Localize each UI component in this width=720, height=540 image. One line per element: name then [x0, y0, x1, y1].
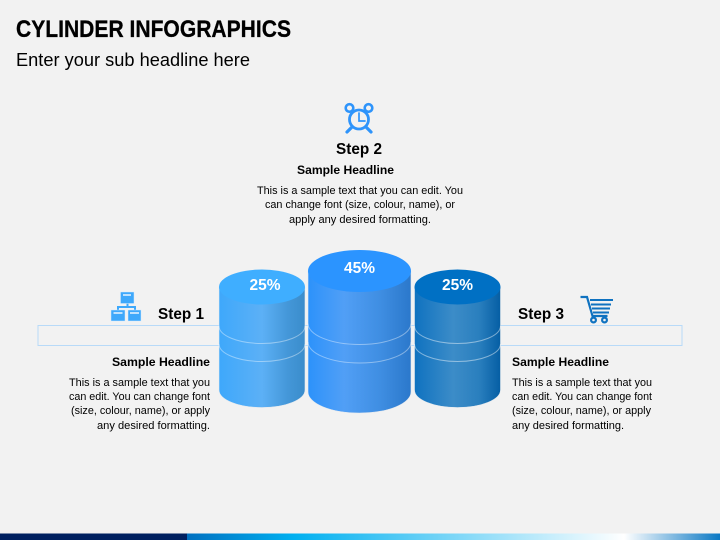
horizontal band	[38, 326, 682, 346]
footer bar	[0, 534, 720, 540]
title: CYLINDER INFOGRAPHICS	[16, 16, 291, 43]
step 3 text block	[512, 355, 652, 432]
step 3 text block: can edit. You can change font	[512, 391, 652, 403]
step 2 text block	[257, 163, 463, 226]
step 1 text block: any desired formatting.	[97, 420, 210, 432]
step 1 label: Step 1	[158, 306, 204, 323]
cylinder: step 3	[414, 270, 500, 408]
cylinder: step 1	[219, 270, 305, 408]
step 1 text block: can edit. You can change font	[69, 391, 210, 403]
cylinder: step 1: 25%	[250, 277, 280, 294]
step 3 text block: This is a sample text that you	[512, 377, 652, 389]
step 3 text block: Sample Headline	[512, 355, 609, 369]
step 2 text block: can change font (size, colour, name), or	[265, 199, 455, 211]
step 1 text block: (size, colour, name), or apply	[71, 405, 210, 417]
subtitle: Enter your sub headline here	[16, 50, 250, 70]
icon: network hierarchy	[111, 292, 141, 321]
step 1 text block: This is a sample text that you	[69, 377, 210, 389]
cylinder: step 2	[308, 250, 411, 413]
step 1 text block: Sample Headline	[112, 355, 210, 369]
icon: alarm clock	[346, 104, 372, 132]
step 2 text block: apply any desired formatting.	[289, 214, 431, 226]
step 2 text block: Sample Headline	[297, 163, 394, 177]
cylinder: step 3: 25%	[442, 277, 473, 294]
step 3 text block: (size, colour, name), or apply	[512, 405, 651, 417]
icon: shopping cart	[580, 297, 613, 322]
cylinder: step 2: 45%	[344, 260, 375, 277]
step 2 text block: This is a sample text that you can edit. You	[257, 185, 463, 197]
step 2 label: Step 2	[336, 141, 382, 158]
step 1 text block	[69, 355, 210, 432]
step 3 text block: any desired formatting.	[512, 420, 624, 432]
step 3 label: Step 3	[518, 306, 564, 323]
